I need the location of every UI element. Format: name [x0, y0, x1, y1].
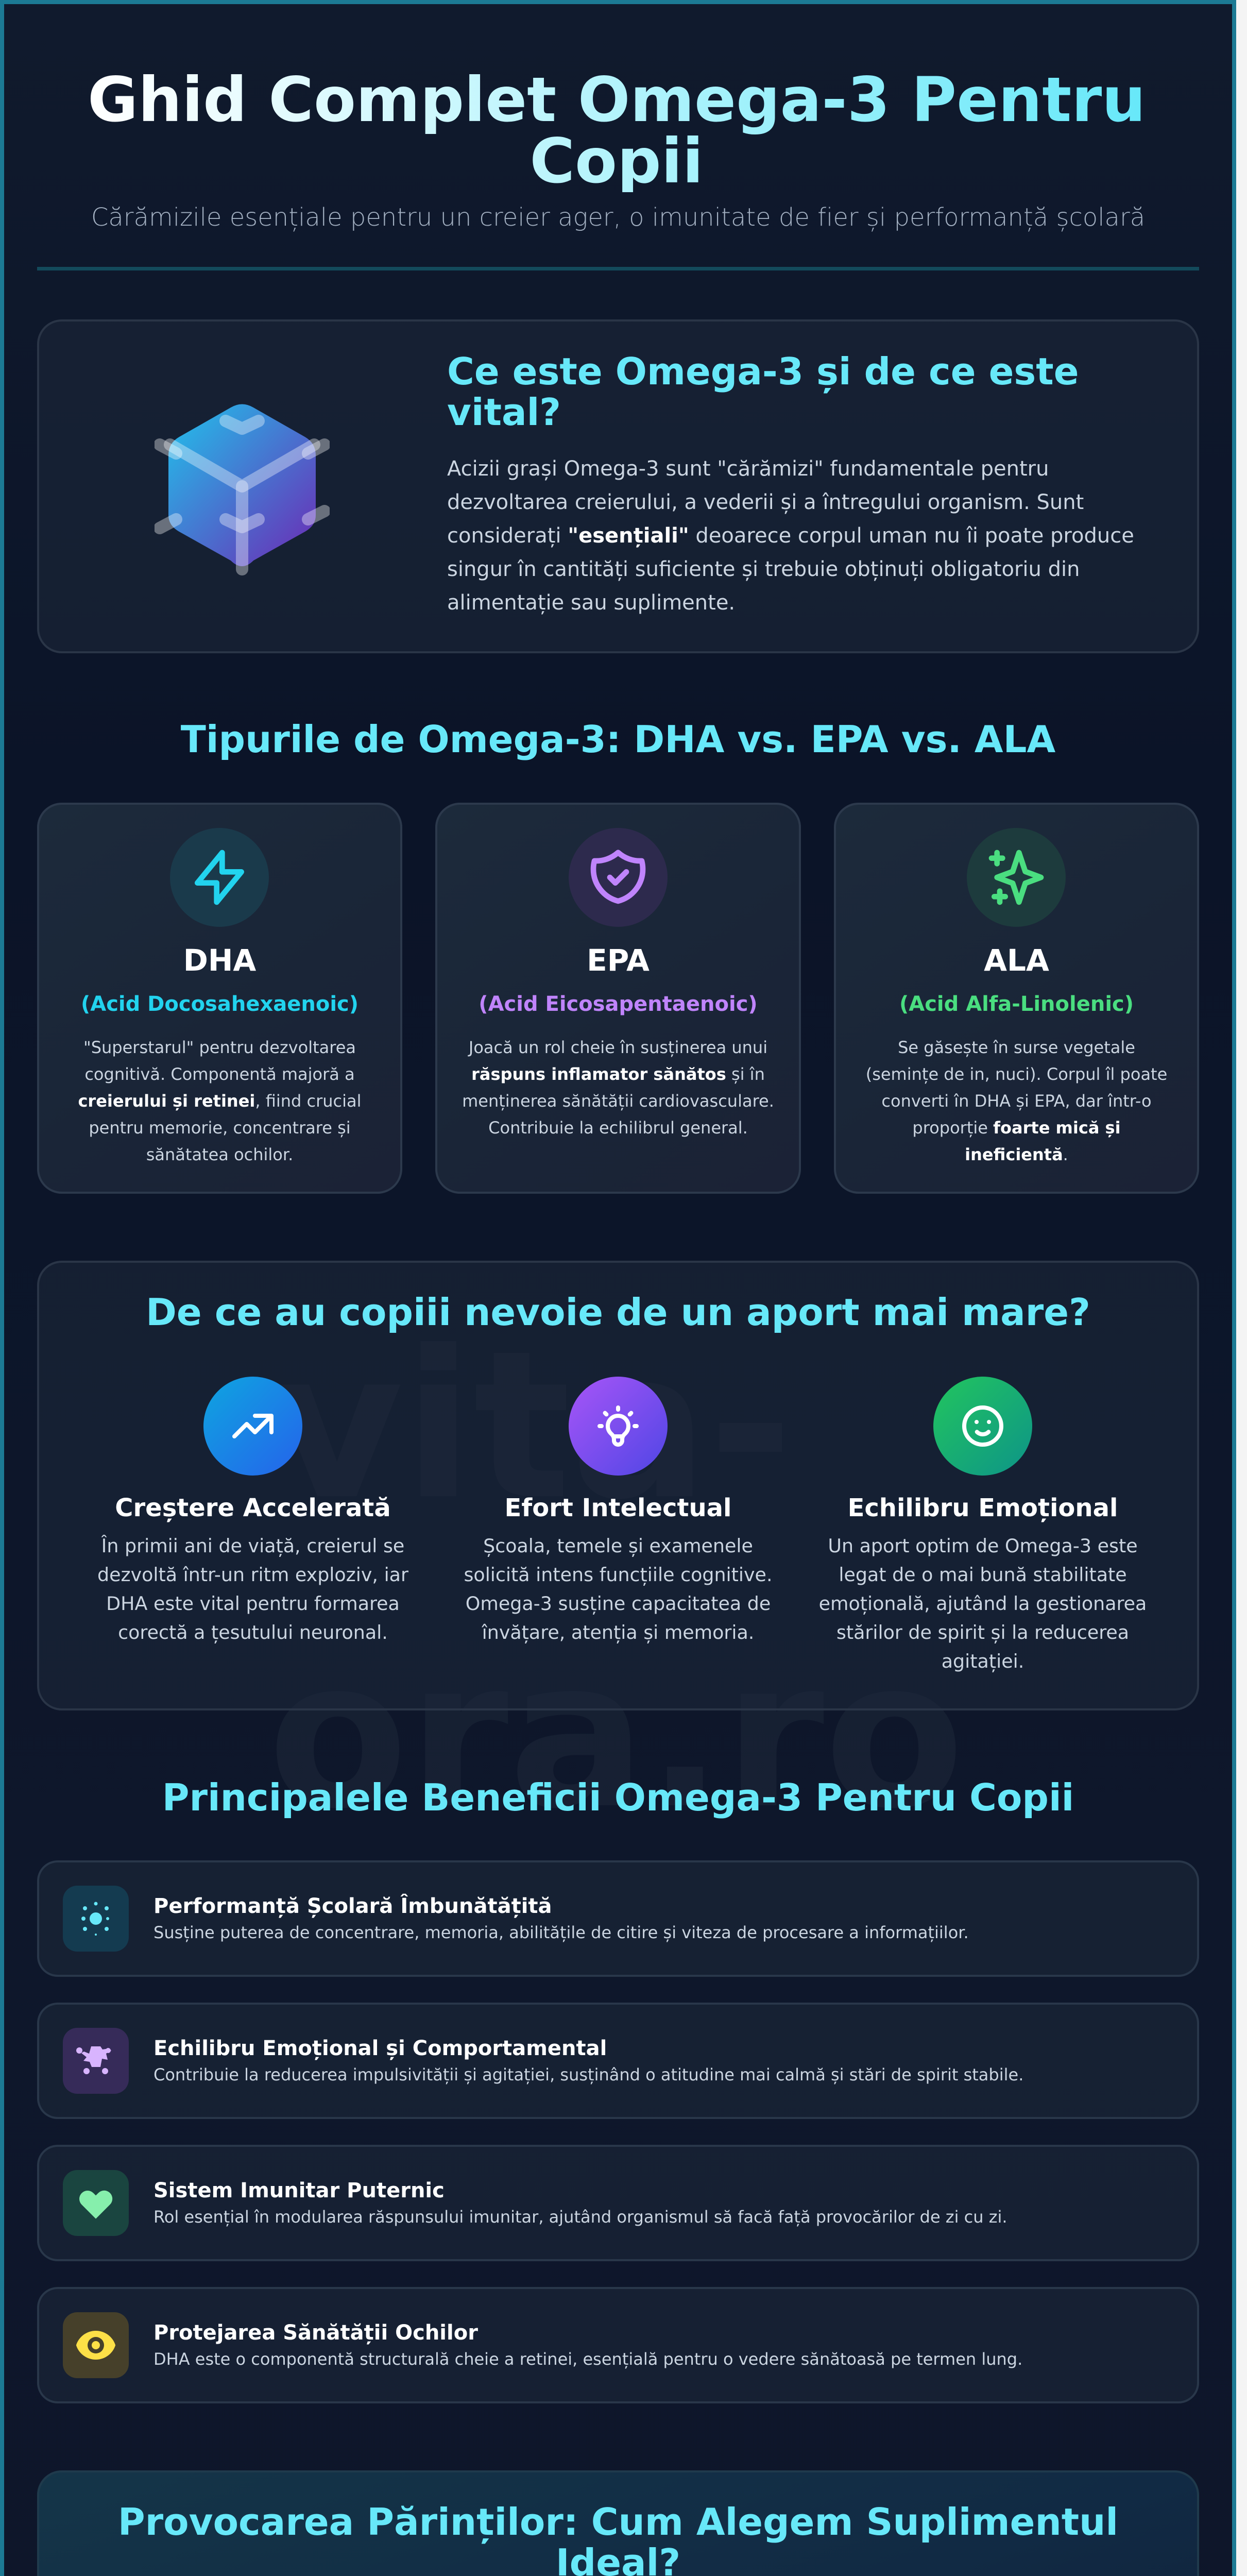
icon: puzzle [63, 2028, 129, 2094]
title: Ghid Complet Omega-3 Pentru [88, 64, 1146, 136]
icon: trending up [203, 1377, 302, 1476]
heading: vital? [447, 391, 561, 434]
description: "Superstarul" pentru dezvoltarea [83, 1038, 356, 1057]
description: Joacă un rol cheie în susținerea unui [469, 1038, 767, 1057]
panel: EPA [435, 803, 801, 1194]
description [97, 1535, 408, 1643]
panel: benefit school [37, 1860, 1199, 1977]
benefit title: Sistem Imunitar Puternic [153, 2179, 445, 2202]
description: dezvoltă într-un ritm exploziv, iar [97, 1564, 408, 1586]
description: pentru memorie, concentrare și [89, 1118, 351, 1138]
description: stărilor de spirit și la reducerea [836, 1621, 1129, 1643]
description: corectă a țesutului neuronal. [118, 1621, 388, 1643]
full name: (Acid Eicosapentaenoic) [479, 992, 758, 1016]
panel: why children need more [37, 1261, 1199, 1710]
text block: Acizii grași Omega-3 sunt "cărămizi" fundamentale pentru [447, 457, 1049, 481]
icon: sun [63, 1886, 129, 1952]
icon: cube [155, 404, 330, 575]
panel: ALA [834, 803, 1199, 1194]
description: Contribuie la echilibrul general. [488, 1118, 748, 1138]
description: cognitivă. Componentă majoră a [84, 1064, 355, 1084]
description [866, 1038, 1167, 1164]
description [464, 1535, 773, 1643]
benefit title: Protejarea Sănătății Ochilor [153, 2321, 478, 2345]
heading: benefits: Principalele Beneficii Omega-3 Pentru Copii [162, 1776, 1074, 1819]
description [462, 1038, 774, 1138]
column: emotional balance [819, 1377, 1147, 1672]
description: solicită intens funcțiile cognitive. [464, 1564, 773, 1586]
icon: shield [569, 828, 668, 927]
benefit title: Echilibru Emoțional și Comportamental [153, 2037, 607, 2060]
description: emoțională, ajutând la gestionarea [819, 1592, 1147, 1615]
benefit text: Rol esențial în modularea răspunsului imunitar, ajutând organismul să facă față provocărilor de zi cu zi. [153, 2207, 1007, 2227]
heading: types: Tipurile de Omega-3: DHA vs. EPA vs. ALA [181, 718, 1055, 761]
icon: lightbulb [569, 1377, 668, 1476]
panel: benefit emotional [37, 2003, 1199, 2119]
heading: De ce au copiii nevoie de un aport mai mare? [146, 1291, 1090, 1334]
text block: alimentație sau suplimente. [447, 591, 735, 615]
description: legat de o mai bună stabilitate [839, 1564, 1127, 1586]
benefit text: Contribuie la reducerea impulsivității și agitației, susținând o atitudine mai calmă și stări de spirit stabile. [153, 2065, 1023, 2084]
column: intellectual effort [464, 1377, 773, 1643]
benefit title: Performanță Școlară Îmbunătățită [153, 1894, 552, 1918]
icon: bolt [170, 828, 269, 927]
subheading: Creștere Accelerată [115, 1494, 391, 1522]
description: Școala, temele și examenele [483, 1535, 753, 1557]
panel: parents' challenge [37, 2470, 1199, 2576]
panel: DHA [37, 803, 402, 1194]
description: sănătatea ochilor. [146, 1145, 293, 1164]
description: răspuns inflamator sănătos și în [471, 1064, 765, 1084]
text block: dezvoltarea creierului, a vederii și a întregului organism. Sunt [447, 490, 1084, 514]
name: DHA [183, 943, 256, 978]
text block [447, 457, 1134, 615]
description [819, 1535, 1147, 1672]
icon: eye [63, 2312, 129, 2378]
description: (semințe de in, nuci). Corpul îl poate [866, 1064, 1167, 1084]
description: învățare, atenția și memoria. [482, 1621, 754, 1643]
description: creierului și retinei, fiind crucial [78, 1091, 362, 1111]
name: ALA [984, 943, 1049, 978]
icon: sparkles [967, 828, 1066, 927]
description: proporție foarte mică și [912, 1118, 1121, 1138]
description: În primii ani de viață, creierul se [101, 1535, 404, 1557]
panel: what is omega-3 [37, 319, 1199, 653]
heading: Ce este Omega-3 și de ce este [447, 350, 1079, 393]
title: Copii [529, 126, 704, 197]
benefit text: DHA este o componentă structurală cheie a retinei, esențială pentru o vedere sănătoasă pe termen lung. [153, 2349, 1022, 2369]
heading: Provocarea Părinților: Cum Alegem Suplimentul [118, 2500, 1118, 2544]
description [78, 1038, 362, 1164]
description: menținerea sănătății cardiovasculare. [462, 1091, 774, 1111]
text block: singur în cantități suficiente și trebuie obținuți obligatoriu din [447, 557, 1080, 581]
description: agitației. [942, 1650, 1024, 1672]
full name: (Acid Alfa-Linolenic) [899, 992, 1134, 1016]
full name: (Acid Docosahexaenoic) [81, 992, 358, 1016]
subtitle: Cărămizile esențiale pentru un creier ager, o imunitate de fier și performanță școlară [91, 203, 1145, 232]
benefit text: Susține puterea de concentrare, memoria, abilitățile de citire și viteza de procesare a informațiilor. [153, 1923, 969, 1942]
column: growth [97, 1377, 408, 1643]
panel: benefit eyes [37, 2287, 1199, 2403]
description: Omega-3 susține capacitatea de [466, 1592, 771, 1615]
icon: smile [933, 1377, 1032, 1476]
description: ineficientă. [965, 1145, 1068, 1164]
description: converti în DHA și EPA, dar într-o [881, 1091, 1152, 1111]
subheading: Efort Intelectual [505, 1494, 731, 1522]
heading [118, 2500, 1118, 2576]
description: DHA este vital pentru formarea [106, 1592, 400, 1615]
text block: considerați "esențiali" deoarece corpul uman nu îi poate produce [447, 524, 1134, 548]
watermark: vita-: vita- [270, 1307, 793, 1545]
subheading: Echilibru Emoțional [848, 1494, 1118, 1522]
title [88, 70, 1146, 192]
icon: heart [63, 2170, 129, 2236]
heading [447, 350, 1079, 434]
description: Un aport optim de Omega-3 este [828, 1535, 1138, 1557]
watermark: ora.ro: ora.ro [268, 1616, 964, 1854]
name: EPA [587, 943, 650, 978]
description: Se găsește în surse vegetale [898, 1038, 1135, 1057]
panel: benefit immune [37, 2145, 1199, 2261]
